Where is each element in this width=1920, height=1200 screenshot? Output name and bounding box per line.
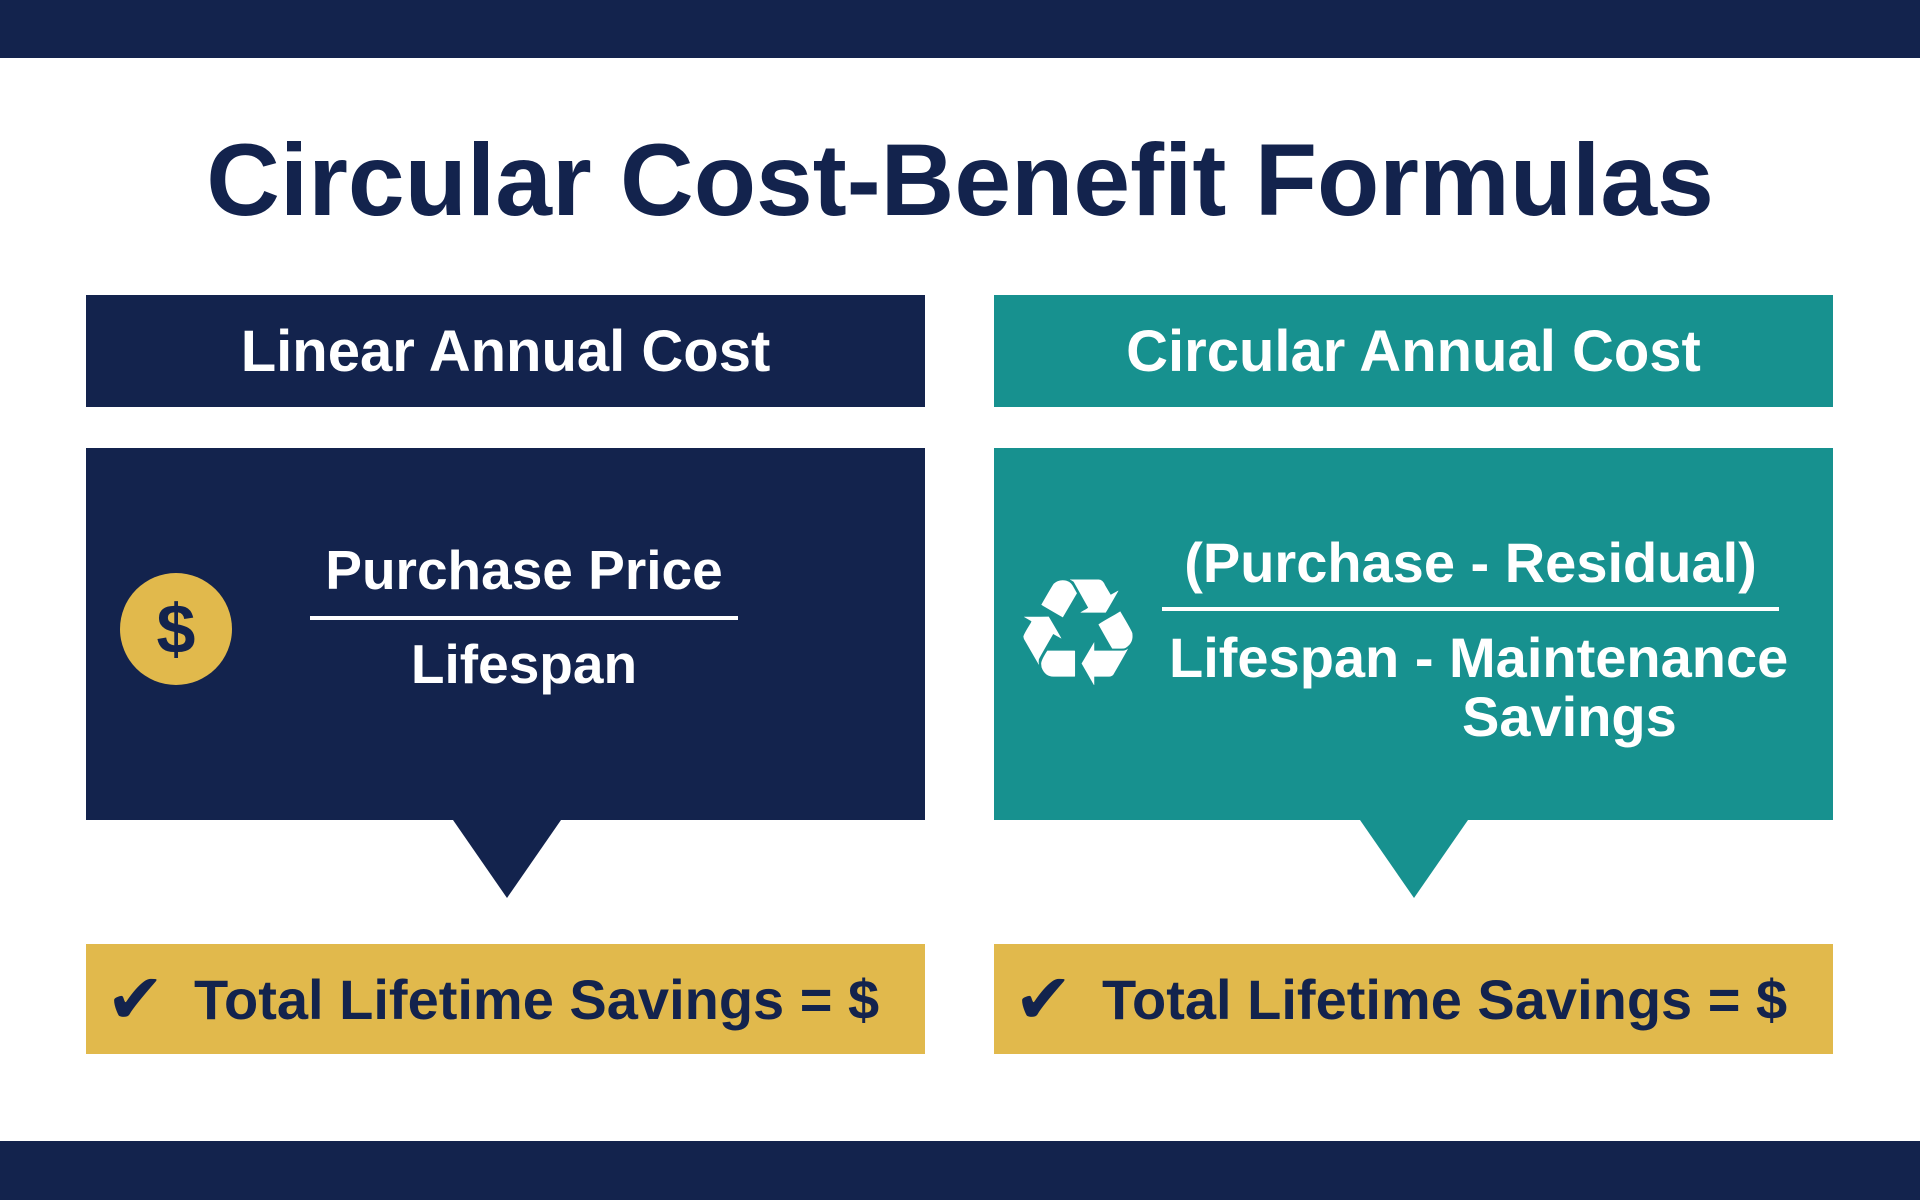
header: circular bbox=[994, 295, 1833, 407]
formula numerator: Purchase Price bbox=[325, 539, 723, 601]
header: circular: Circular Annual Cost bbox=[1126, 318, 1701, 384]
savings bar: circular bbox=[994, 944, 1833, 1054]
savings bar: linear: Total Lifetime Savings = $ bbox=[194, 968, 879, 1030]
bottom bar bbox=[0, 1141, 1920, 1200]
fraction line bbox=[1162, 607, 1779, 611]
icon: check: ✔ bbox=[106, 958, 165, 1040]
icon: dollar coin: $ bbox=[157, 590, 195, 668]
formula denominator: Lifespan bbox=[411, 633, 637, 695]
icon: recycle: ♻ bbox=[1011, 547, 1145, 721]
formula numerator: (Purchase - Residual) bbox=[1184, 531, 1757, 594]
header: linear: Linear Annual Cost bbox=[241, 318, 770, 384]
formula denominator: Lifespan - Maintenance bbox=[1169, 626, 1788, 689]
pointer: linear bbox=[453, 820, 561, 898]
pointer: circular bbox=[1360, 820, 1468, 898]
header: linear bbox=[86, 295, 925, 407]
top bar bbox=[0, 0, 1920, 58]
icon: dollar coin bbox=[120, 573, 232, 685]
icon: check: ✔ bbox=[1014, 958, 1073, 1040]
savings bar: linear bbox=[86, 944, 925, 1054]
panel: circular formula bbox=[994, 448, 1833, 898]
title: Circular Cost-Benefit Formulas bbox=[206, 123, 1714, 237]
panel: linear formula bbox=[86, 448, 925, 898]
panel: circular formula: Savings bbox=[1462, 685, 1677, 748]
savings bar: circular: Total Lifetime Savings = $ bbox=[1102, 968, 1787, 1030]
fraction line bbox=[310, 616, 738, 620]
